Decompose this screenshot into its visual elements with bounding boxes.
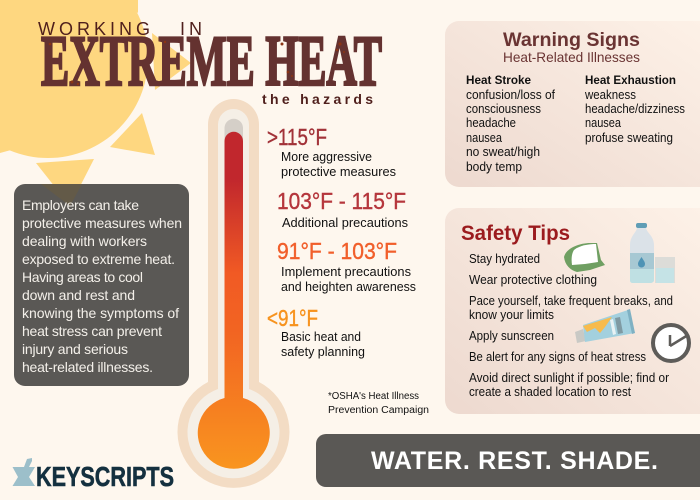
callout: employers: dealing with workers <box>22 233 147 249</box>
callout: employers: knowing the symptoms of <box>22 305 179 321</box>
callout: employers: protective measures when <box>22 215 182 231</box>
list: heat stroke: Heat Stroke <box>466 73 531 87</box>
list: heat stroke: no sweat/high <box>466 145 540 159</box>
list: heat exhaustion: headache/dizziness <box>585 102 685 116</box>
banner: water rest shade: WATER. REST. SHADE. <box>371 447 658 475</box>
level: over 115: More aggressive <box>281 149 372 164</box>
level: over 115: >115°F <box>267 124 327 150</box>
level: 91 to 103: and heighten awareness <box>281 279 416 294</box>
level: under 91: safety planning <box>281 344 365 359</box>
list: heat exhaustion <box>584 73 685 145</box>
icon: water bottle and glass <box>630 223 675 283</box>
icon: mortar and pestle <box>12 458 35 486</box>
panel: warning signs <box>445 21 700 187</box>
level: over 115: protective measures <box>281 164 396 179</box>
list: heat stroke: nausea <box>466 131 502 145</box>
title: IN <box>180 19 202 39</box>
heading: warning signs: Heat-Related Illnesses <box>503 49 640 65</box>
footnote <box>328 391 429 416</box>
list: heat exhaustion: nausea <box>585 116 621 130</box>
level: under 91: <91°F <box>267 305 318 331</box>
icon: sunscreen tube <box>575 309 635 343</box>
title: EXTREME HEAT <box>41 21 382 101</box>
list: tips: Apply sunscreen <box>469 329 554 343</box>
list: heat exhaustion: Heat Exhaustion <box>585 73 676 87</box>
panel: safety tips <box>445 208 700 414</box>
list: heat stroke: body temp <box>466 160 522 174</box>
level: under 91 <box>267 305 365 359</box>
callout: employers: exposed to extreme heat. <box>22 251 175 267</box>
list: heat exhaustion: weakness <box>584 88 636 102</box>
list: heat stroke: consciousness <box>466 102 541 116</box>
callout: employers: Employers can take <box>22 197 139 213</box>
icon: sun <box>0 0 191 206</box>
icon: clock <box>653 325 689 361</box>
level: over 115 <box>267 124 396 179</box>
list: tips: Wear protective clothing <box>469 273 597 287</box>
heading: warning signs <box>503 30 640 65</box>
icon: cap <box>564 243 605 272</box>
callout: employers: Having areas to cool <box>22 269 143 285</box>
title: the hazards <box>262 91 373 107</box>
callout: employers: heat stress can prevent <box>22 323 162 339</box>
list: tips: create a shaded location to rest <box>469 385 631 399</box>
level: 103 to 115: Additional precautions <box>282 215 408 230</box>
list: tips <box>469 252 673 399</box>
heading: warning signs: Warning Signs <box>503 30 640 51</box>
list: heat exhaustion: profuse sweating <box>585 131 673 145</box>
level: 103 to 115 <box>277 188 408 230</box>
footnote: Prevention Campaign <box>328 405 429 416</box>
title <box>38 19 382 107</box>
list: tips: Pace yourself, take frequent breaks, and <box>469 294 673 308</box>
list: heat stroke: headache <box>466 116 516 130</box>
callout: employers <box>14 184 189 386</box>
list: tips: Be alert for any signs of heat stress <box>469 350 646 364</box>
callout: employers: down and rest and <box>22 287 135 303</box>
title: WORKING <box>38 19 150 39</box>
thermometer <box>178 99 290 488</box>
heading: safety tips: Safety Tips <box>461 222 570 245</box>
list: heat stroke <box>466 73 556 174</box>
level: 91 to 103: 91°F - 103°F <box>277 238 397 264</box>
level: under 91: Basic heat and <box>281 329 361 344</box>
list: heat stroke: confusion/loss of <box>466 88 556 102</box>
list: tips: Avoid direct sunlight if possible; find or <box>469 371 669 385</box>
logo: keyscripts <box>12 458 174 492</box>
level: 91 to 103 <box>277 238 416 294</box>
list: tips: Stay hydrated <box>469 252 540 266</box>
level: 91 to 103: Implement precautions <box>281 264 411 279</box>
callout: employers: injury and serious <box>22 341 128 357</box>
logo: keyscripts: KEYSCRIPTS <box>36 461 174 492</box>
banner: water rest shade <box>316 434 700 487</box>
level: 103 to 115: 103°F - 115°F <box>277 188 406 214</box>
list: tips: know your limits <box>469 308 554 322</box>
footnote: *OSHA's Heat Illness <box>328 391 419 402</box>
callout: employers: heat-related illnesses. <box>22 359 153 375</box>
